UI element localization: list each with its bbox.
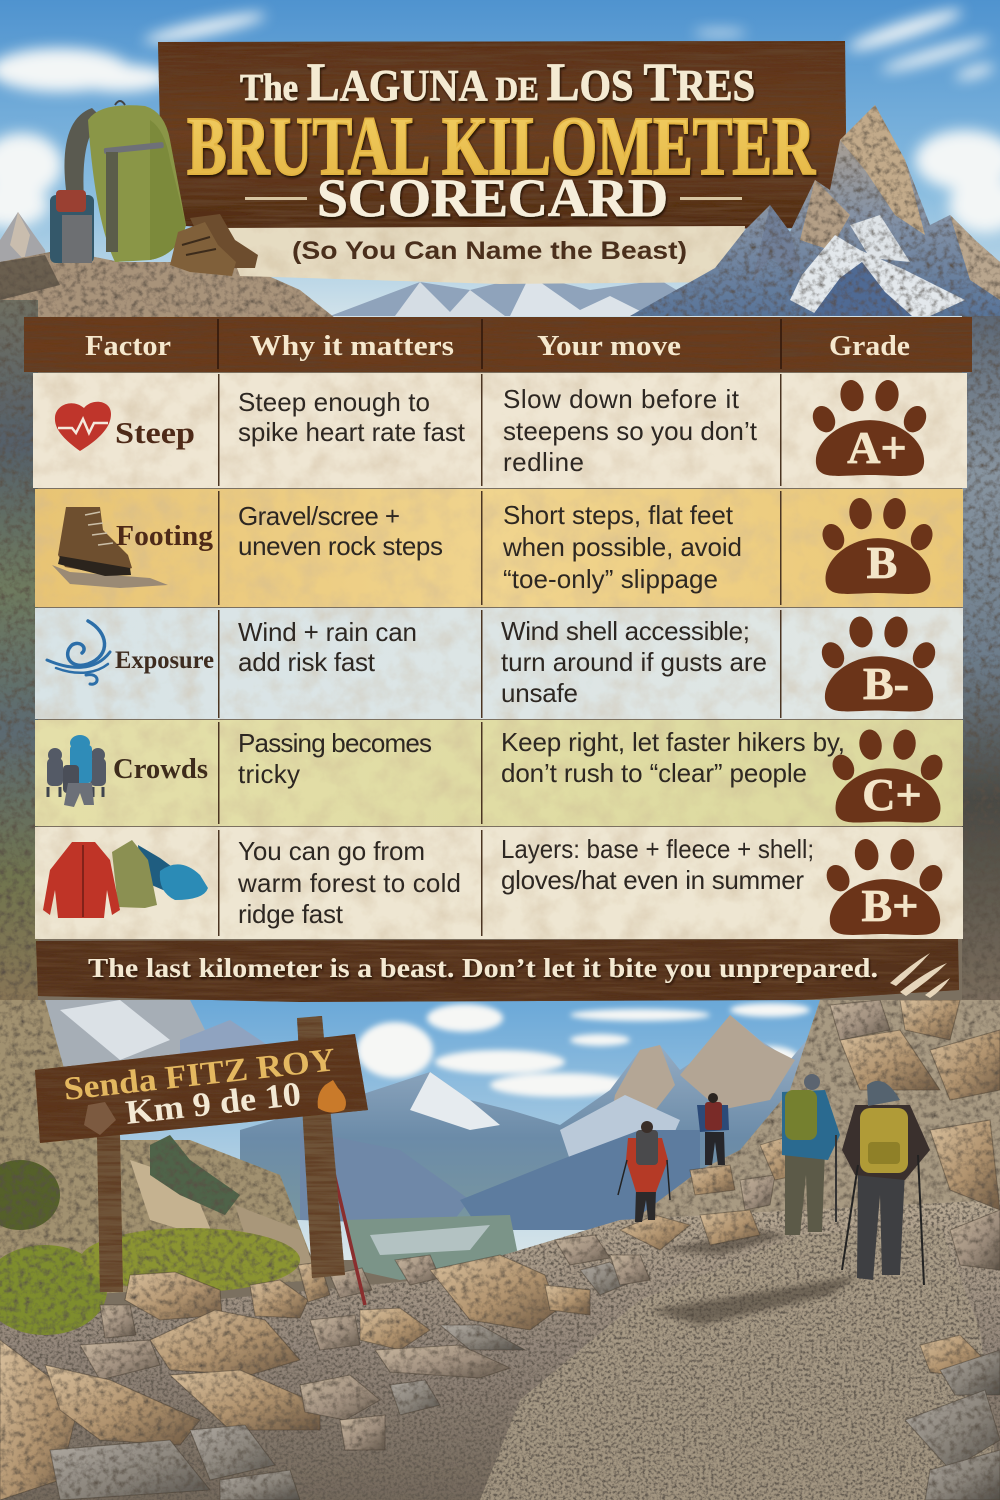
move text: redline	[503, 447, 584, 477]
background: ground and trail	[0, 1000, 1000, 1500]
why text	[238, 501, 443, 561]
subtitle parchment	[222, 226, 745, 284]
icon: jackets and duffel bags	[43, 840, 208, 918]
header: factor: Factor	[85, 331, 171, 362]
move text	[501, 727, 845, 788]
why text	[238, 728, 432, 789]
trail shadows	[650, 1230, 860, 1325]
move text	[503, 384, 758, 477]
grade: B paw	[818, 497, 937, 594]
move text: Keep right, let faster hikers by,	[501, 727, 845, 757]
hiker 4 with yellow pack	[842, 1081, 930, 1285]
icon: rock on sign	[84, 1102, 116, 1135]
background: far mountains behind heading	[0, 212, 720, 316]
icon: pouch on sign	[318, 1080, 346, 1113]
why text: spike heart rate fast	[238, 417, 466, 447]
move text: don’t rush to “clear” people	[501, 758, 807, 788]
why text	[238, 617, 417, 677]
hiker 3 with green pack	[782, 1074, 840, 1235]
icon: wind swirl	[47, 621, 110, 684]
background: sky	[0, 0, 1000, 320]
why text: You can go from	[238, 836, 425, 866]
move text: Short steps, flat feet	[503, 500, 734, 530]
move text: Wind shell accessible;	[501, 616, 750, 646]
move text: “toe-only” slippage	[503, 564, 718, 594]
sign posts	[97, 1016, 345, 1292]
row: steep	[33, 373, 967, 488]
trail sign	[35, 1016, 368, 1292]
right cliff	[560, 1000, 1000, 1300]
clouds	[0, 4, 1000, 233]
factor label: Steep	[115, 415, 195, 450]
boots	[190, 214, 258, 268]
header: grade: Grade	[829, 331, 910, 362]
move text	[501, 616, 767, 708]
why text	[238, 387, 466, 447]
icon: heart	[55, 402, 111, 451]
grade: C+ paw: C+	[862, 769, 922, 820]
move text: gloves/hat even in summer	[501, 865, 804, 895]
foreground Fitz Roy peak over title board	[630, 105, 1000, 316]
header: your move: Your move	[537, 331, 681, 362]
hiker 2 blue jacket	[697, 1093, 729, 1165]
grade: A+ paw: A+	[847, 422, 907, 473]
grade: C+ paw	[828, 728, 947, 823]
grade: B+ paw	[822, 838, 947, 935]
background: rocky ledge	[0, 250, 335, 320]
sign line one: Senda FITZ ROY	[62, 1042, 337, 1108]
title line one: The LAGUNA DE LOS TRES	[240, 52, 755, 112]
distant ridges	[240, 1015, 830, 1220]
why text: ridge fast	[238, 899, 344, 929]
row: exposure	[35, 608, 963, 719]
hiker 1 red jacket	[618, 1121, 670, 1222]
move text: Slow down before it	[503, 384, 740, 414]
rocks	[0, 1000, 1000, 1500]
sign board	[35, 1034, 368, 1143]
why text: uneven rock steps	[238, 531, 443, 561]
trekking pole	[332, 1165, 365, 1305]
factor label: Footing	[116, 520, 214, 552]
move text	[501, 834, 814, 895]
move text: turn around if gusts are	[501, 647, 767, 677]
icon: backpack and boots	[50, 101, 258, 276]
why text: Steep enough to	[238, 387, 430, 417]
hikers	[618, 1074, 930, 1285]
row: footing	[35, 489, 963, 607]
row: layers	[35, 827, 963, 939]
footer text: The last kilometer is a beast. Don’t let it bite you unprepared.	[88, 953, 878, 983]
grade: B+ paw: B+	[862, 880, 918, 931]
grade: B paw: B	[867, 537, 897, 588]
background: lower mountain scene	[0, 1000, 1000, 1300]
why text: Gravel/scree +	[238, 501, 400, 531]
sign line two: Km 9 de 10	[124, 1076, 303, 1132]
icon: hiking boot	[52, 507, 168, 588]
title board	[158, 41, 846, 284]
move text: when possible, avoid	[502, 532, 742, 562]
why text: add risk fast	[238, 647, 376, 677]
move text: steepens so you don’t	[503, 416, 758, 446]
icon: crowd of hikers	[47, 735, 106, 807]
icon: claw scratches	[890, 953, 950, 998]
grade: B- paw	[818, 615, 939, 711]
grade: B- paw: B-	[863, 658, 909, 709]
move text	[502, 500, 742, 594]
title line three: SCORECARD	[317, 168, 668, 228]
factor label: Exposure	[115, 647, 214, 674]
clouds lower	[357, 1003, 810, 1097]
move text: unsafe	[501, 678, 578, 708]
background: side cliffs beside the table	[0, 290, 1000, 1020]
move text: Layers: base + fleece + shell;	[501, 834, 814, 864]
shrubs	[0, 1160, 300, 1335]
why text: warm forest to cold	[237, 868, 461, 898]
footer banner	[36, 939, 959, 1002]
why text: Passing becomes	[238, 728, 432, 758]
row: crowds	[35, 720, 963, 826]
table header	[24, 317, 972, 372]
why text	[237, 836, 461, 929]
factor label: Crowds	[113, 754, 208, 785]
grade: A+ paw	[809, 379, 930, 476]
why text: Wind + rain can	[238, 617, 417, 647]
header: why it matters: Why it matters	[250, 331, 454, 362]
subtitle text: (So You Can Name the Beast)	[292, 237, 687, 265]
why text: tricky	[238, 759, 300, 789]
